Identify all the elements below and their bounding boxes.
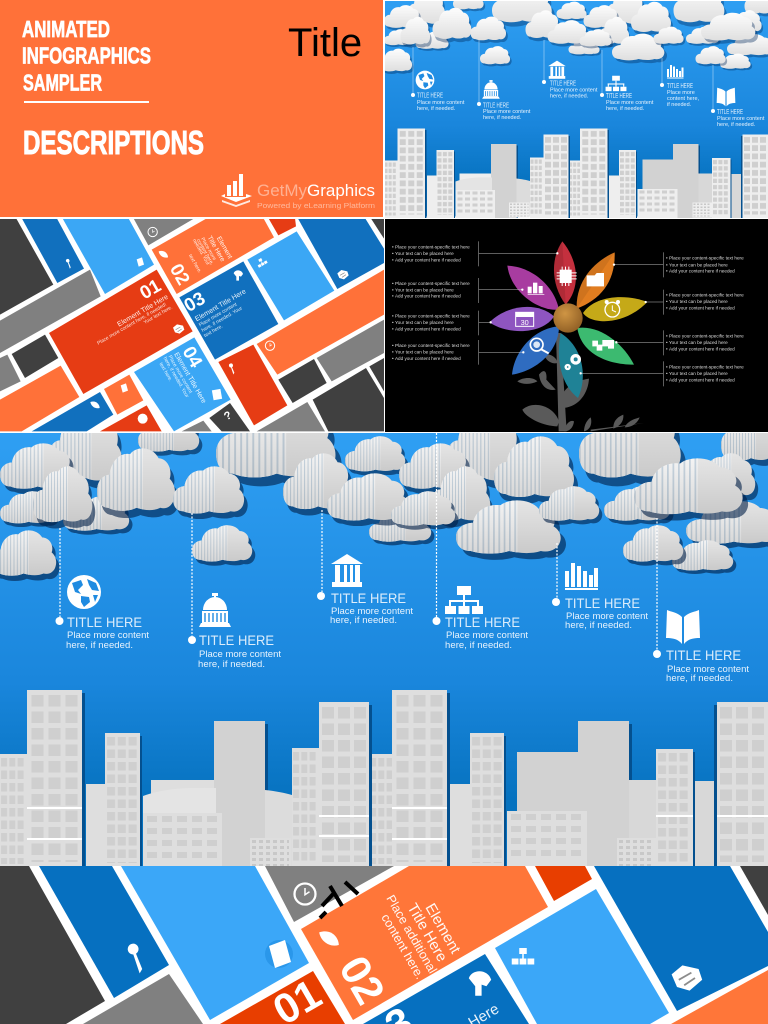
tile 03 text: Element Title Here: [194, 288, 248, 323]
left bullet text: Your text can be placed here: [395, 287, 454, 292]
small label descriptions: Place more content: [717, 116, 765, 122]
tile 03 text: here, if needed. Your: [201, 305, 244, 334]
black fragment: [320, 882, 358, 918]
tile 04 text: Place more content: [167, 354, 194, 395]
dotted connector lines: [60, 433, 657, 650]
small label descriptions: content here,: [667, 96, 700, 102]
right bullet text: Place your content-specific text here: [669, 365, 744, 370]
timeline item: bar chart: Place more content: [566, 611, 648, 622]
right bullet text: •: [666, 365, 668, 370]
small label descriptions: here, if needed.: [717, 122, 756, 128]
tile 03 text: text here.: [203, 323, 224, 339]
small label descriptions: [417, 88, 765, 128]
timeline item: bank: TITLE HERE: [331, 590, 406, 606]
logo: GetMyGraphics: GetMy: [257, 181, 307, 200]
timeline item: book: [653, 610, 749, 684]
small label descriptions: Place more content: [417, 100, 465, 106]
small label descriptions: Place more content: [483, 109, 531, 115]
petal: orange: [577, 252, 615, 309]
tile 01 text: Your text here.: [143, 305, 174, 326]
right bullet text: •: [666, 378, 668, 383]
left bullet text: •: [392, 356, 394, 361]
tile 04 text: Element Title Here: [172, 351, 207, 405]
left bullet text: Add your content here if needed: [395, 326, 461, 331]
timeline item: capitol: here, if needed.: [198, 659, 265, 670]
left bullet text: •: [392, 343, 394, 348]
right bullet text: Place your content-specific text here: [669, 333, 744, 338]
petal: teal: [559, 333, 583, 398]
heading: animated infographics sampler: ANIMATED: [22, 16, 110, 42]
small label descriptions: here, if needed.: [606, 106, 645, 112]
timeline item: org chart: Place more content: [446, 630, 528, 641]
right bullet text: Add your content here if needed: [669, 378, 735, 383]
tile 03 fragments: [377, 997, 502, 1024]
tile 02 text: 02: [166, 260, 194, 288]
icon: key: [128, 944, 142, 974]
icon: clock: [294, 884, 316, 904]
small label text: [417, 80, 743, 114]
small label descriptions: if needed.: [667, 102, 692, 108]
icon: bars: [528, 283, 544, 295]
tile 02 text: content here,: [195, 238, 215, 266]
left bullet text: Place your content-specific text here: [395, 343, 470, 348]
flower centre: [553, 303, 583, 333]
left bullet text: •: [392, 326, 394, 331]
left bullet text: •: [392, 287, 394, 292]
icon: globe small: [416, 71, 434, 89]
icon: book small: [717, 88, 735, 106]
small label text: TITLE HERE: [550, 78, 576, 88]
right bullet text: Add your content here if needed: [669, 269, 735, 274]
icon: chip: [557, 267, 577, 286]
tile 02 text: content here.: [378, 912, 427, 982]
left bullet text: Add your content here if needed: [395, 294, 461, 299]
timeline item: capitol: TITLE HERE: [199, 632, 274, 648]
timeline item: book: TITLE HERE: [666, 647, 741, 663]
tile 02 text: 02: [330, 948, 394, 1012]
title placeholder: Title: [288, 21, 362, 65]
tile 04 text: here, if needed. Your: [162, 356, 190, 399]
left bullet text: Add your content here if needed: [395, 257, 461, 262]
timeline item: globe: Place more content: [67, 630, 149, 641]
icon: head: [469, 971, 491, 996]
timeline item: bar chart: here, if needed.: [565, 620, 632, 631]
timeline item: globe: [56, 575, 149, 651]
right bullet text: •: [666, 299, 668, 304]
left bullet text: •: [392, 320, 394, 325]
icon: calendar 30: [516, 312, 534, 327]
timeline item: capitol: [188, 593, 281, 670]
icon: alarm clock: [605, 300, 620, 317]
left bullet text: •: [392, 257, 394, 262]
logo: GetMyGraphics: Graphics: [307, 181, 375, 200]
tile 01 text: Place more content here, if needed!: [96, 302, 168, 347]
timeline item: book: Place more content: [667, 664, 749, 675]
right bullet text: •: [666, 256, 668, 261]
tile 03 text: 03: [180, 287, 209, 316]
icon: bank small: [548, 61, 566, 79]
icon: folder: [587, 273, 604, 286]
small label text: TITLE HERE: [717, 107, 743, 116]
petal: yellow: [583, 297, 647, 321]
timeline item: org chart: [432, 586, 528, 651]
right bullet text: Your text can be placed here: [669, 262, 728, 267]
right bullet text: Your text can be placed here: [669, 299, 728, 304]
petal: red: [554, 241, 576, 305]
tile 04 text: 04: [179, 342, 207, 372]
leader lines: [479, 241, 663, 386]
icon: capitol small: [482, 80, 500, 99]
icon: calendar 30: 30: [521, 318, 529, 327]
logo: GetMyGraphics: Powered by eLearning Platform: [257, 203, 375, 210]
icon: handshake: [672, 965, 702, 991]
icon: folder: [265, 940, 293, 968]
right bullet text: Your text can be placed here: [669, 371, 728, 376]
left bullet text: •: [392, 314, 394, 319]
tile 02 text: Element: [215, 235, 233, 260]
left bullet text: Add your content here if needed: [395, 356, 461, 361]
panel: clouds and city small: [379, 0, 768, 220]
timeline item: bank: [317, 554, 413, 626]
timeline item: globe: TITLE HERE: [67, 614, 142, 630]
right bullet text: •: [666, 293, 668, 298]
timeline item: bank: here, if needed.: [330, 615, 397, 626]
tile 02 text: needed. Your: [191, 238, 211, 267]
right bullet text: •: [666, 340, 668, 345]
mosaic icons: ?: [222, 409, 234, 423]
right bullet text: •: [666, 269, 668, 274]
tile 04 text: text here.: [158, 362, 173, 383]
left bullet text: •: [392, 294, 394, 299]
tile 01 text: Element Title Here: [116, 294, 170, 328]
left bullet text: [392, 245, 470, 361]
tile 03 text: Place more content: [198, 301, 239, 328]
small label text: TITLE HERE: [606, 91, 632, 100]
icon: org chart small: [606, 76, 626, 91]
petal: purple: [489, 307, 554, 331]
petal: green: [577, 328, 634, 365]
timeline item: globe: here, if needed.: [66, 640, 133, 651]
panel: title slide: [0, 0, 408, 217]
icon: puzzle: [592, 340, 614, 351]
tile 03 text: [184, 290, 246, 337]
small label text: TITLE HERE: [667, 81, 693, 90]
heading: animated infographics sampler: [22, 20, 151, 91]
left bullet text: •: [392, 281, 394, 286]
tile 02 text: Place more: [199, 237, 217, 262]
timeline labels small: [411, 40, 743, 116]
title placeholder: S: [381, 21, 408, 65]
icon: gears: [566, 356, 579, 369]
tile 02 text: Place additional: [383, 892, 440, 976]
left bullet text: •: [392, 251, 394, 256]
tile 01 text: [96, 280, 172, 345]
timeline item: bar chart: TITLE HERE: [565, 595, 640, 611]
icon: org chart: [512, 948, 534, 964]
small label descriptions: here, if needed.: [417, 106, 456, 112]
small label text: TITLE HERE: [483, 100, 509, 110]
mosaic icons: [66, 227, 349, 424]
petal: blue: [512, 326, 559, 375]
left bullet text: •: [392, 349, 394, 354]
clouds: [0, 433, 768, 581]
right bullet text: Add your content here if needed: [669, 306, 735, 311]
timeline item: org chart: here, if needed.: [445, 640, 512, 651]
right bullet text: •: [666, 371, 668, 376]
timeline item: org chart: TITLE HERE: [445, 614, 520, 630]
tile 02 text: Element: [422, 900, 464, 957]
panel: diagonal mosaic large crop: [0, 866, 768, 1024]
panel: flower diagram: [385, 219, 768, 432]
city skyline: [0, 690, 768, 873]
icon: bars small: [667, 65, 684, 78]
left bullet text: •: [392, 245, 394, 250]
small label descriptions: here, if needed.: [550, 94, 589, 100]
right bullet text: Your text can be placed here: [669, 340, 728, 345]
timeline item: capitol: Place more content: [199, 649, 281, 660]
right bullet text: Add your content here if needed: [669, 346, 735, 351]
left bullet text: Place your content-specific text here: [395, 314, 470, 319]
small label descriptions: Place more content: [550, 88, 598, 94]
small label descriptions: Place more: [667, 90, 695, 96]
right bullet text: [666, 256, 744, 383]
right bullet text: Place your content-specific text here: [669, 256, 744, 261]
tile 01 text: 01: [136, 275, 164, 303]
small label descriptions: here, if needed.: [483, 115, 522, 121]
right bullet text: Place your content-specific text here: [669, 293, 744, 298]
tile 02 text: text here.: [187, 253, 203, 274]
right bullet text: •: [666, 306, 668, 311]
panel: clouds and city large: [0, 395, 768, 873]
right bullet text: •: [666, 333, 668, 338]
right bullet text: •: [666, 262, 668, 267]
timeline item: bank: Place more content: [331, 606, 413, 617]
logo: GetMyGraphics: [221, 174, 375, 210]
left bullet text: Your text can be placed here: [395, 251, 454, 256]
timeline item: bar chart: [552, 563, 648, 631]
tile 02 text: [171, 235, 232, 286]
petal: magenta: [507, 266, 559, 310]
heading: descriptions: DESCRIPTIONS: [23, 124, 204, 161]
icon: leaf: [319, 931, 339, 946]
timeline item: book: here, if needed.: [666, 673, 733, 684]
heading: animated infographics sampler: SAMPLER: [23, 70, 102, 96]
small label text: TITLE HERE: [417, 90, 443, 100]
panel: diagonal mosaic small: [0, 218, 384, 431]
tile 04 text: [160, 346, 206, 403]
heading: animated infographics sampler: INFOGRAPHICS: [22, 42, 151, 68]
left bullet text: Place your content-specific text here: [395, 281, 470, 286]
right bullet text: •: [666, 346, 668, 351]
flower stem and leaves: [517, 333, 644, 431]
left bullet text: Place your content-specific text here: [395, 245, 470, 250]
tile 02 text: [330, 892, 464, 1012]
left bullet text: Your text can be placed here: [395, 349, 454, 354]
icon: globe magnifier: [530, 338, 549, 353]
tile 02 text: Title Here: [404, 900, 450, 965]
left bullet text: Your text can be placed here: [395, 320, 454, 325]
tile 02 text: Title Here: [206, 235, 226, 263]
small label descriptions: Place more content: [606, 100, 654, 106]
